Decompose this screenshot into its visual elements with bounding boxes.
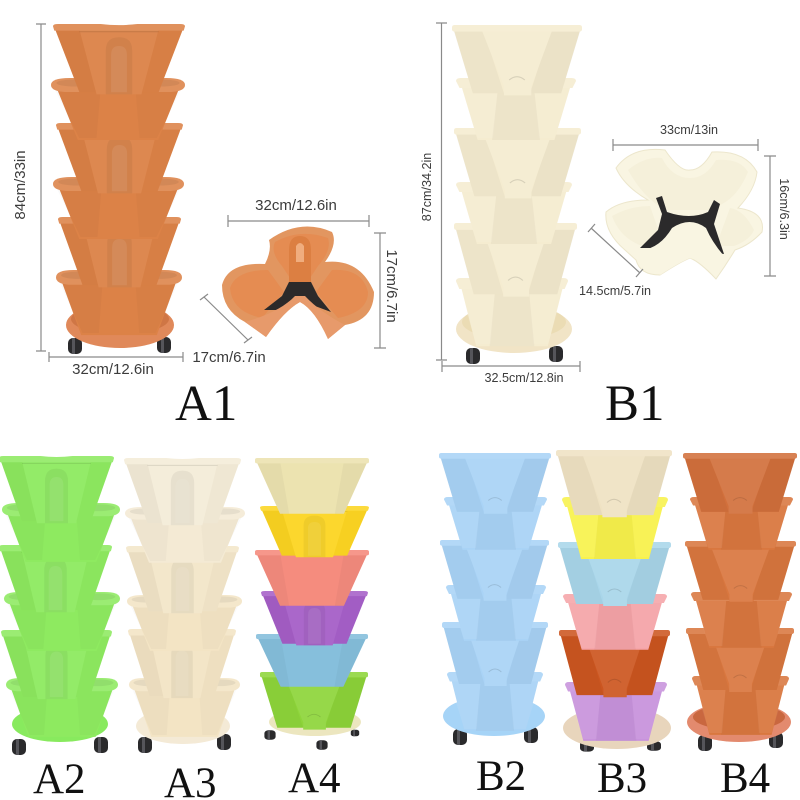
tower B4 terracotta: [683, 453, 797, 751]
dimensions B1 piece: 16cm/6.3in: [777, 178, 791, 240]
dimensions A1 tower: 84cm/33in: [12, 150, 29, 220]
dimensions B1 tower: 87cm/34.2in: [420, 153, 434, 221]
tray and wheels A3: [136, 708, 231, 753]
label B2: B2: [476, 753, 526, 800]
dimensions B1 tower: 32.5cm/12.8in: [484, 371, 564, 385]
dimensions A1 piece: 17cm/6.7in: [192, 349, 266, 366]
tower A1 terracotta: [51, 24, 185, 354]
dimensions B1 tower: [420, 23, 580, 385]
dimensions A1 piece: [192, 197, 400, 366]
dimensions A1 piece: 32cm/12.6in: [255, 197, 337, 214]
label A1: A1: [175, 376, 237, 432]
tower A3 cream: [124, 458, 245, 753]
tray and wheels A2: [12, 706, 108, 755]
dimensions A1 piece: 17cm/6.7in: [383, 249, 400, 323]
dimensions A1 tower: [12, 24, 183, 378]
tower B2 blue: [439, 453, 551, 745]
dimensions A1 tower: 32cm/12.6in: [72, 361, 154, 378]
dimensions B1 piece: 33cm/13in: [660, 123, 718, 137]
tray and wheels A1: [66, 302, 174, 354]
tower A2 green: [0, 456, 120, 755]
tray and wheels B3: [563, 707, 671, 752]
planter piece A1 top view: [222, 227, 374, 339]
dimensions B1 piece: [579, 123, 791, 298]
tower B3 multicolour: [556, 450, 672, 752]
dimensions B1 piece: 14.5cm/5.7in: [579, 284, 651, 298]
label B1: B1: [605, 376, 665, 432]
tower B1 cream: [452, 25, 582, 364]
tray and wheels B2: [443, 696, 545, 745]
tray and wheels A4: [264, 708, 361, 750]
tray and wheels B1: [456, 305, 572, 364]
tray and wheels B4: [687, 702, 791, 751]
planter piece B1 top view: [606, 149, 762, 279]
tower A4 multicolour: [255, 458, 369, 750]
